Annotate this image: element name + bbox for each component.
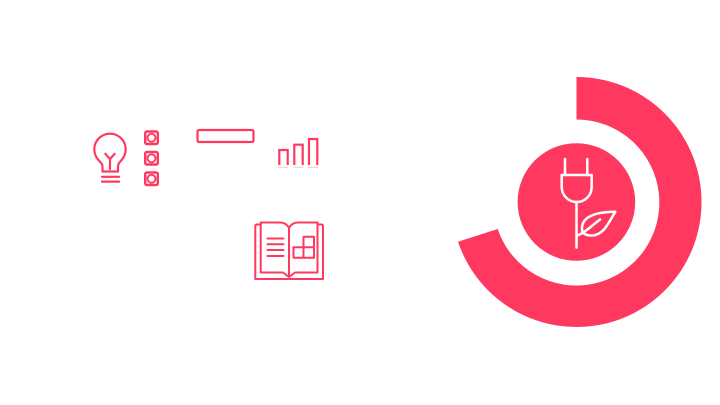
option square 2 (145, 152, 158, 164)
icon: stacked option squares (145, 132, 158, 185)
center circle (518, 143, 635, 261)
icon: open book (255, 222, 323, 279)
icon: bar chart (278, 139, 318, 167)
option square 1 (145, 132, 158, 144)
empty rounded bar (198, 130, 254, 142)
icon: light bulb (94, 134, 126, 182)
center badge: plug with leaf (518, 143, 635, 261)
option square 3 (145, 172, 158, 185)
donut progress ring (458, 77, 702, 327)
icon: plug and leaf (562, 159, 615, 248)
